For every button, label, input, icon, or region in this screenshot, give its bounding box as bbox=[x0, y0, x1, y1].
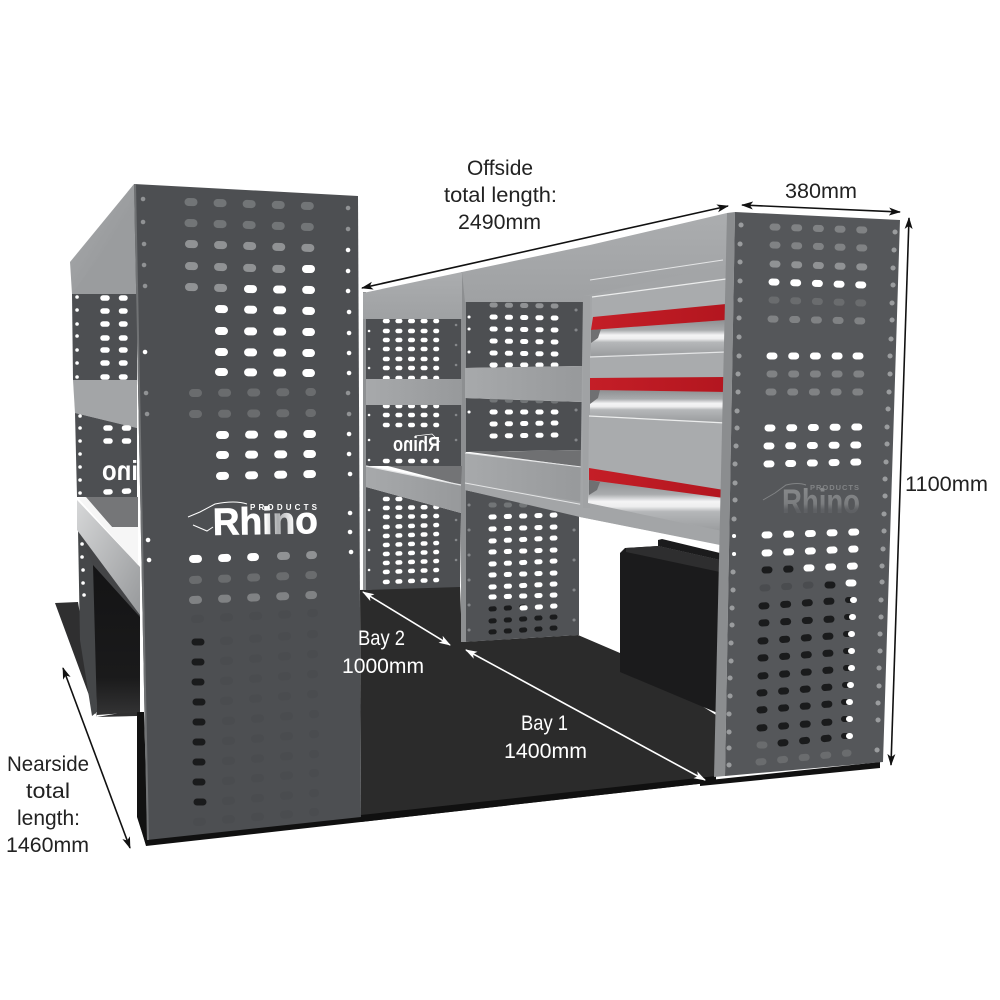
label: bay 2: Bay 2 bbox=[358, 627, 405, 650]
label: nearside total length bbox=[6, 753, 89, 857]
logo: Rhino Products, offside: PRODUCTS bbox=[810, 483, 859, 492]
label: bay 2: 1000mm bbox=[342, 655, 424, 678]
panel: upper shelf caps bbox=[363, 213, 727, 319]
label: 380mm: 380mm bbox=[785, 180, 857, 203]
arrow: depth 380mm bbox=[742, 205, 900, 212]
lower upright bbox=[78, 530, 140, 716]
arrow: height 1100mm bbox=[891, 218, 909, 765]
holes: bay 1 back wall bbox=[469, 305, 576, 632]
arrow: offside total length bbox=[362, 206, 728, 288]
panel: nearside end panel bbox=[134, 184, 361, 840]
holes: offside end panel bbox=[729, 225, 895, 765]
logo: Rhino Products, nearside: Rhino bbox=[212, 500, 318, 544]
lower shelf bbox=[77, 497, 140, 615]
logo: Rhino Products, offside bbox=[763, 483, 860, 521]
arrow: bay 2 bbox=[363, 592, 450, 645]
holes: nearside end panel bbox=[143, 199, 351, 822]
panel: bay 1 shelves bbox=[465, 265, 727, 545]
label: bay 1 bbox=[504, 712, 587, 763]
label: offside total length: total length: bbox=[444, 184, 557, 207]
panel: bay 2 shelves bbox=[366, 379, 462, 513]
label: offside total length: 2490mm bbox=[458, 211, 541, 234]
arrow: bay 1 bbox=[466, 650, 705, 780]
label: nearside total length: 1460mm bbox=[6, 834, 89, 857]
label: bay 1: Bay 1 bbox=[521, 712, 568, 735]
floor mat bbox=[55, 586, 716, 846]
drawer 2 bbox=[590, 352, 726, 422]
toolbox bbox=[620, 539, 720, 714]
label: nearside total length: Nearside bbox=[7, 753, 89, 776]
mirrored logo: nearside back section: Rhino bbox=[102, 455, 170, 486]
label: offside total length: Offside bbox=[467, 157, 533, 180]
holes: nearside back section bbox=[77, 297, 129, 493]
logo: Rhino Products, offside: Rhino bbox=[782, 483, 860, 521]
label: nearside total length: length: bbox=[17, 807, 80, 830]
panel: offside end panel bbox=[700, 212, 900, 786]
panel: drawers bbox=[588, 279, 726, 531]
holes: bay 2 back wall bbox=[369, 321, 456, 582]
label: offside total length bbox=[444, 157, 557, 234]
label: bay 1: 1400mm bbox=[504, 740, 587, 763]
arrow: nearside total length bbox=[63, 668, 130, 848]
panel: nearside back section bbox=[70, 184, 140, 716]
label: bay 2 bbox=[342, 627, 424, 678]
panel: bay 1 back wall bbox=[461, 272, 583, 642]
logo: Rhino Products, nearside: PRODUCTS bbox=[250, 503, 318, 512]
mirrored logo: bay 2: Rhino bbox=[393, 434, 440, 456]
drawer 1 bbox=[591, 279, 726, 356]
label: nearside total length: total bbox=[26, 780, 70, 803]
label: 1100mm: 1100mm bbox=[905, 473, 988, 496]
drawer 3 bbox=[588, 416, 726, 531]
panel: bay 2 back wall bbox=[363, 292, 462, 590]
